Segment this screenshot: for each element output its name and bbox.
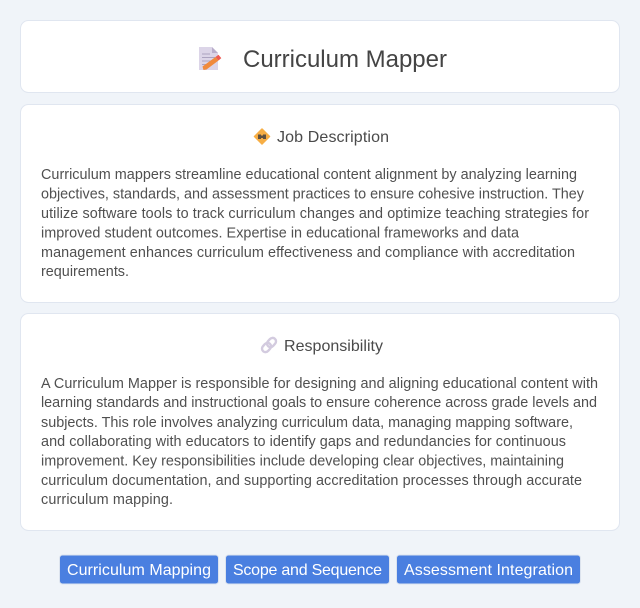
text block: responsibility: improvement. Key responsibilities include developing clear objectives, maintaining — [41, 454, 564, 470]
icon: document with pencil — [199, 47, 221, 70]
text block: job description: Curriculum mappers streamline educational content alignment by analyzing learning — [41, 167, 577, 183]
tag: curriculum mapping — [60, 555, 218, 584]
heading: job description: Job Description — [277, 129, 389, 146]
panel: job description — [20, 104, 620, 302]
panel: responsibility — [20, 314, 620, 530]
text block: job description: utilize software tools to track curriculum changes and optimize teaching strategies for — [41, 206, 589, 222]
text block: responsibility: curriculum mapping. — [41, 492, 173, 508]
tags row — [60, 555, 580, 584]
tag: assessment integration — [396, 555, 580, 584]
text block: job description: requirements. — [41, 264, 129, 280]
text block: responsibility: subjects. This role involves analyzing curriculum data, managing mapping software, — [41, 415, 573, 431]
text block: responsibility — [41, 376, 598, 508]
icon: chain link — [261, 336, 277, 354]
text block: job description: improved student outcomes. Expertise in educational frameworks and data — [41, 226, 519, 242]
panel: title card — [20, 20, 620, 92]
text block: responsibility: A Curriculum Mapper is responsible for designing and aligning educational content with — [41, 376, 598, 392]
title: Curriculum Mapper — [243, 46, 447, 73]
text block: job description: objectives, standards, and assessment practices to ensure cohesive instruction. They — [41, 186, 585, 202]
tag: assessment integration: Assessment Integration — [404, 562, 573, 579]
heading: responsibility: Responsibility — [284, 338, 383, 355]
text block: job description: management enhances curriculum effectiveness and compliance with accreditation — [41, 245, 575, 261]
tag: scope and sequence: Scope and Sequence — [233, 562, 382, 579]
text block: job description — [41, 167, 589, 280]
tag: scope and sequence — [226, 555, 390, 584]
tag: curriculum mapping: Curriculum Mapping — [67, 562, 211, 579]
text block: responsibility: curriculum documentation, and supporting accreditation processes through accurate — [41, 473, 582, 489]
icon: puzzle diamond — [254, 129, 270, 144]
text block: responsibility: learning standards and instructional goals to ensure coherence across grade levels and — [41, 395, 597, 411]
text block: responsibility: and collaborating with educators to identify gaps and redundancies for continuous — [41, 434, 566, 450]
